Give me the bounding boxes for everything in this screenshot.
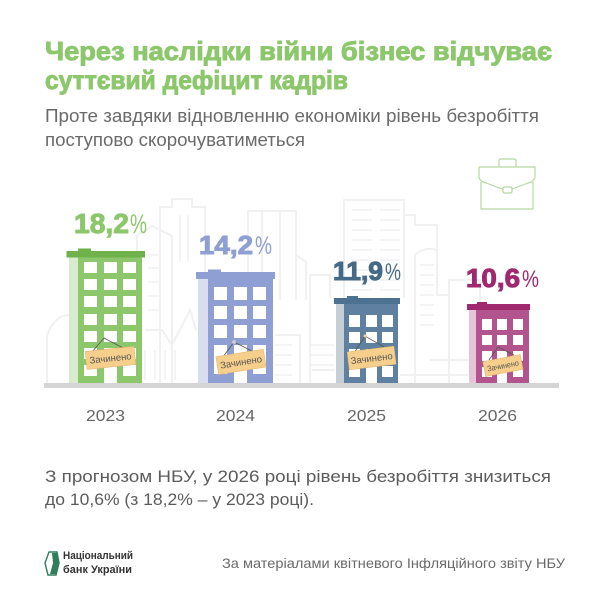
building 2025 (334, 296, 400, 383)
building 2026: Зачинено (486, 358, 520, 373)
year 2024: 2024 (216, 408, 255, 425)
icon: briefcase (479, 159, 535, 209)
title: суттєвий дефіцит кадрів (45, 65, 348, 95)
conclusion text: до 10,6% (з 18,2% – у 2023 році). (45, 490, 314, 509)
value 2025: 11,9 (333, 256, 383, 286)
conclusion text (45, 467, 551, 509)
logo: National Bank of Ukraine: Національний (63, 550, 133, 562)
building 2023 (66, 248, 145, 383)
building 2025: Зачинено (350, 351, 393, 367)
building 2024: Зачинено (219, 354, 263, 372)
logo: National Bank of Ukraine (45, 550, 133, 576)
value 2024: 14,2 (199, 230, 253, 260)
year 2026: 2026 (478, 408, 517, 425)
ground line (44, 383, 559, 388)
year 2023: 2023 (86, 408, 125, 425)
value 2023: 18,2 (74, 208, 129, 239)
value 2024 (199, 230, 272, 260)
title: Через наслідки війни бізнес відчуває (45, 36, 552, 66)
value 2026 (466, 263, 539, 293)
logo: National Bank of Ukraine: банк України (63, 564, 132, 576)
subtitle (45, 106, 539, 150)
year 2025: 2025 (347, 408, 386, 425)
value 2026: 10,6 (466, 263, 520, 293)
conclusion text: З прогнозом НБУ, у 2026 році рівень безробіття знизиться (45, 467, 551, 486)
subtitle: поступово скорочуватиметься (45, 130, 305, 150)
building 2026 (467, 302, 530, 383)
value 2024: % (255, 232, 272, 260)
background cityscape windows (145, 210, 434, 380)
building 2024 (196, 270, 275, 383)
source note: За матеріалами квітневого Інфляційного звіту НБУ (222, 555, 565, 571)
subtitle: Проте завдяки відновленню економіки рівень безробіття (45, 106, 539, 126)
value 2025: % (385, 259, 401, 286)
background cityscape (47, 199, 480, 383)
value 2026: % (522, 266, 539, 293)
title (45, 36, 552, 95)
value 2023: % (130, 209, 147, 239)
building 2023: Зачинено (89, 351, 132, 367)
